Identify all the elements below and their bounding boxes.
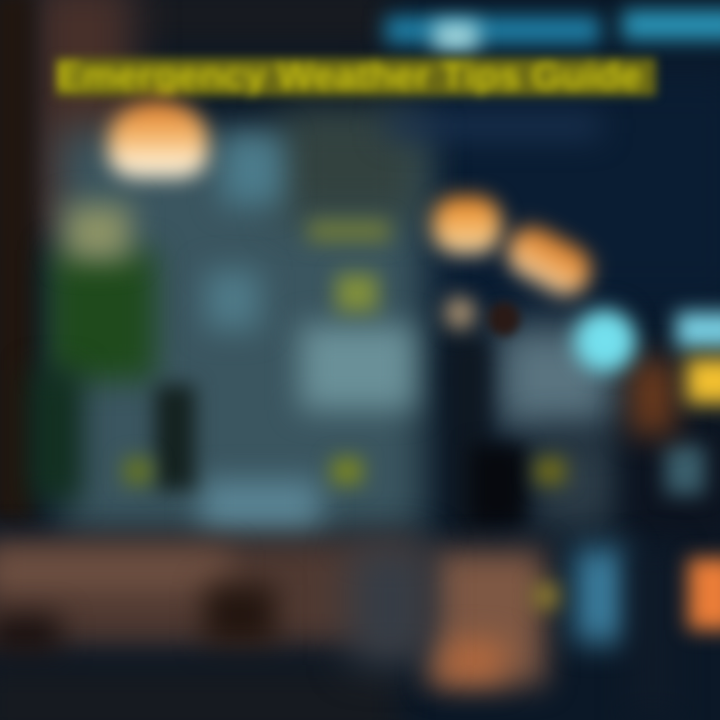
panel: right gray figure area xyxy=(495,325,615,430)
plant shadow xyxy=(30,370,80,500)
dark column figure xyxy=(155,385,195,490)
wood table left light xyxy=(0,550,230,592)
bottom orange glow xyxy=(435,640,505,682)
panel: light blue patch xyxy=(222,135,282,205)
wood table xyxy=(0,540,420,645)
background: top dark band xyxy=(130,0,390,50)
icon: yellow middle xyxy=(332,458,362,484)
top cyan bar right xyxy=(622,10,720,40)
right teal patch xyxy=(665,445,705,495)
table shadow middle xyxy=(205,585,275,645)
orange streak lamp lower xyxy=(498,218,600,304)
icon: yellow right xyxy=(535,458,565,484)
plant highlight xyxy=(65,205,130,260)
panel: upper dim area xyxy=(280,110,420,220)
right dark panel xyxy=(625,420,720,540)
panel: central blue-gray infographic xyxy=(60,130,425,535)
top cyan bar left xyxy=(385,16,600,44)
person pale face xyxy=(444,296,476,330)
panel: lower blue patch xyxy=(200,480,320,530)
top cyan highlight xyxy=(434,22,478,50)
text: yellow heading xyxy=(308,220,390,242)
plant xyxy=(50,250,155,380)
table shadow left xyxy=(0,615,60,655)
bottom right dark xyxy=(630,545,675,720)
icon: yellow upper xyxy=(336,274,378,312)
dark person legs xyxy=(470,445,525,525)
panel: lower right slate xyxy=(530,435,620,530)
orange right block xyxy=(688,558,720,630)
icon: yellow bottom xyxy=(534,584,558,608)
floor xyxy=(0,665,400,720)
orange streak lamp upper xyxy=(432,196,502,254)
right brown figure xyxy=(630,360,675,435)
background: top-left brown wall xyxy=(30,0,135,240)
bottom blue panel xyxy=(575,548,627,643)
cyan glow circle xyxy=(574,310,636,372)
dark person silhouette xyxy=(450,340,488,530)
right cyan block xyxy=(676,312,720,348)
bottom slate strip xyxy=(350,545,430,665)
right yellow block xyxy=(686,358,720,404)
left wood post xyxy=(0,0,34,520)
icon: yellow left xyxy=(124,458,152,484)
panel: mid blue patch xyxy=(205,270,260,330)
person head xyxy=(488,302,520,336)
bottom orange-brown panel xyxy=(430,550,545,685)
panel: pale blue patch xyxy=(300,325,415,410)
lamp glow left xyxy=(108,100,208,178)
background: night sky right xyxy=(400,60,720,320)
subtitle bar xyxy=(385,115,600,137)
